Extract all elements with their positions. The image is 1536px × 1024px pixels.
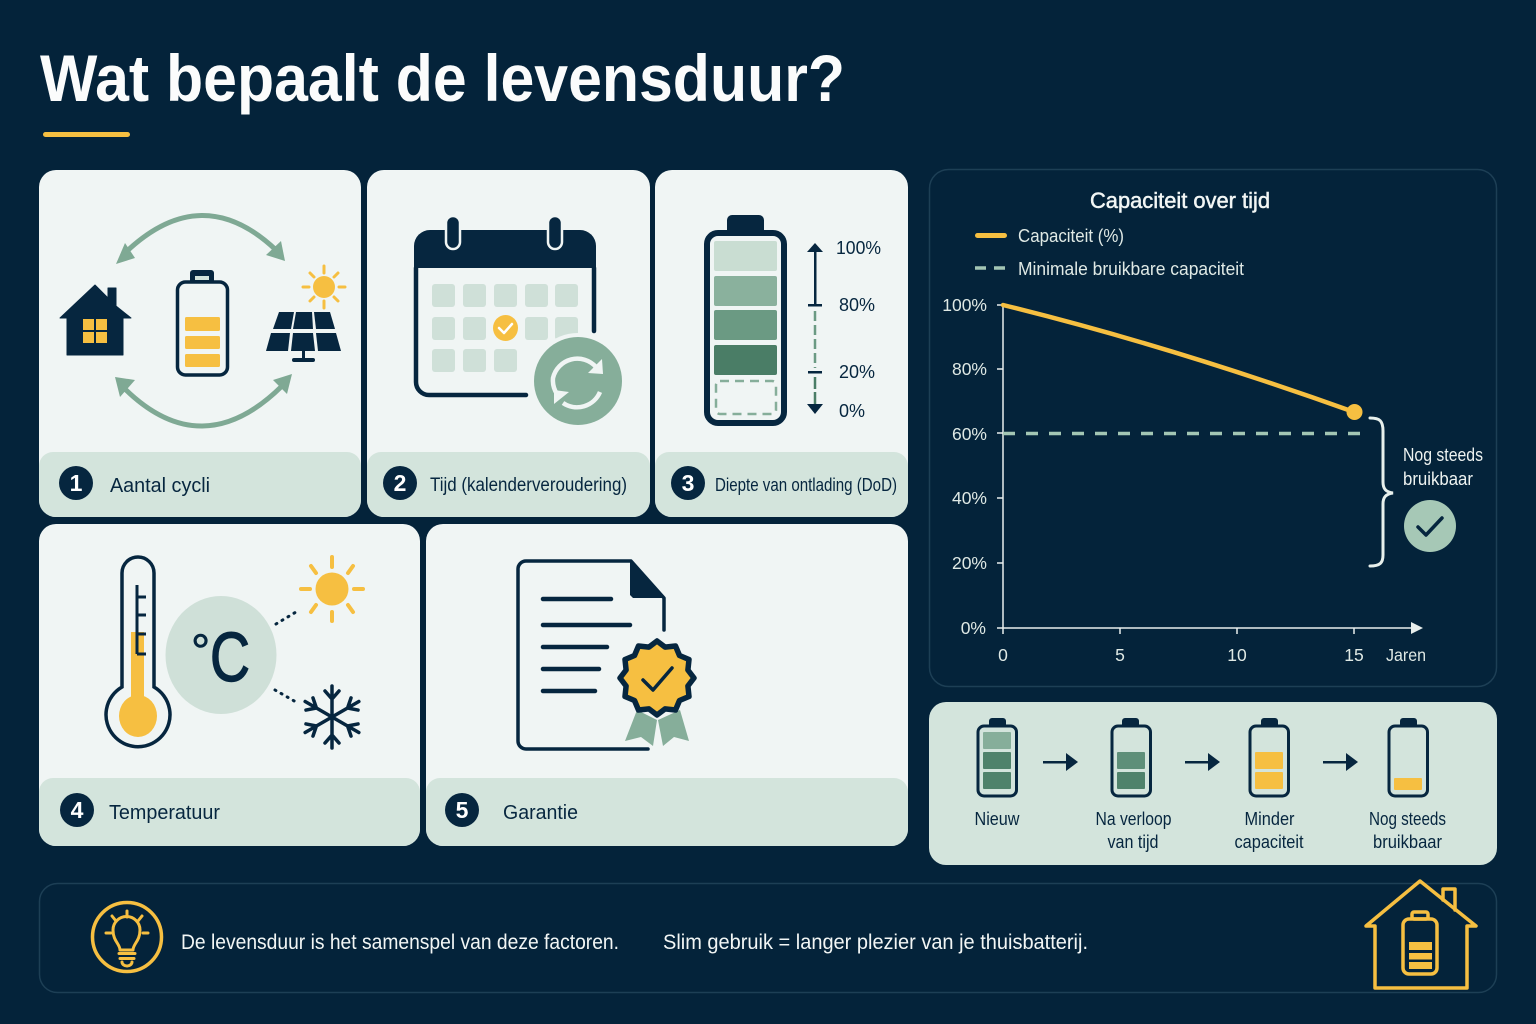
callout: nog steeds bruikbaar: [1403, 444, 1483, 552]
stage: na verloop van tijd: Na verloop: [1096, 808, 1172, 829]
footer text: Slim gebruik = langer plezier van je thuisbatterij.: [663, 930, 1088, 954]
label band: 4: [71, 797, 84, 823]
label band: [39, 452, 361, 517]
icon: solar panel: [266, 312, 341, 362]
label band: [367, 452, 650, 517]
legend: [975, 226, 1244, 279]
label band: 1: [70, 470, 83, 496]
icon: calendar: [414, 216, 596, 395]
label band: Garantie: [503, 802, 578, 824]
legend: Minimale bruikbare capaciteit: [1018, 259, 1244, 279]
panel: diepte van ontlading: [655, 170, 908, 517]
icon: cycle arrows: [115, 215, 292, 426]
icon: sun: [303, 266, 345, 308]
scale labels: 0%: [839, 401, 865, 421]
label band: [655, 452, 908, 517]
label band: Tijd (kalenderveroudering): [430, 475, 627, 496]
celsius circle: [166, 596, 276, 714]
scale labels: 20%: [839, 362, 875, 382]
panel: temperatuur: [39, 524, 420, 846]
icon: refresh circle: [530, 333, 626, 429]
icon: house: [60, 285, 131, 355]
icon: snowflake: [302, 686, 362, 748]
scale arrow: [807, 243, 823, 414]
label band: Temperatuur: [109, 802, 220, 824]
callout: nog steeds bruikbaar: Nog steeds: [1403, 444, 1483, 465]
panel: aantal cycli: [39, 170, 361, 517]
y axis labels: [942, 295, 987, 638]
stage: nog steeds bruikbaar: Nog steeds: [1369, 808, 1446, 829]
arrow: [1043, 753, 1078, 771]
celsius circle: C: [210, 618, 250, 696]
stage: minder capaciteit: capaciteit: [1234, 831, 1304, 852]
celsius circle: °: [191, 626, 210, 679]
chart title: Capaciteit over tijd: [1090, 188, 1270, 213]
y axis labels: 100%: [942, 295, 987, 315]
y axis labels: 60%: [952, 424, 987, 444]
stage: na verloop van tijd: van tijd: [1108, 831, 1158, 852]
x axis labels: 0: [998, 645, 1008, 665]
legend: Capaciteit (%): [1018, 226, 1124, 246]
panel: kalenderveroudering: [367, 170, 650, 517]
x axis labels: 15: [1344, 645, 1364, 665]
label band: Diepte van ontlading (DoD): [715, 475, 897, 495]
brace: [1370, 418, 1393, 566]
y axis labels: 80%: [952, 359, 987, 379]
label band: 2: [394, 470, 406, 496]
panel: capaciteit chart: [930, 170, 1496, 686]
y axis labels: 0%: [961, 618, 986, 638]
x axis labels: 10: [1227, 645, 1247, 665]
minimum capacity dashed line: [1003, 432, 1360, 435]
stage: nieuw: [974, 718, 1020, 829]
x axis labels: [998, 645, 1426, 665]
icon: battery levels: [707, 215, 784, 423]
panel: battery stages: [929, 702, 1497, 865]
stage: na verloop van tijd: [1096, 718, 1172, 852]
footer text: De levensduur is het samenspel van deze factoren.: [181, 930, 619, 954]
stage: nog steeds bruikbaar: bruikbaar: [1373, 831, 1442, 852]
label band: 5: [456, 797, 469, 823]
icon: lightbulb: [92, 902, 162, 972]
arrow: [1185, 753, 1220, 771]
icon: certificate seal: [620, 641, 694, 746]
title underline: [43, 132, 130, 137]
panel: garantie: [426, 524, 908, 846]
icon: battery: [178, 270, 228, 375]
stage: minder capaciteit: [1234, 718, 1304, 852]
label band: [39, 778, 420, 846]
scale labels: 100%: [836, 238, 881, 258]
title: Wat bepaalt de levensduur?: [40, 41, 845, 115]
stage: nieuw: Nieuw: [974, 808, 1020, 829]
arrow: [1323, 753, 1358, 771]
label band: [426, 778, 908, 846]
stage: minder capaciteit: Minder: [1244, 808, 1294, 829]
y axis labels: 20%: [952, 553, 987, 573]
x axis labels: 5: [1115, 645, 1125, 665]
connector dots: [275, 612, 296, 702]
icon: document: [518, 560, 665, 749]
icon: house with battery: [1366, 881, 1476, 988]
icon: thermometer: [106, 557, 170, 747]
capacity line: [1003, 305, 1362, 420]
axes: [997, 305, 1423, 634]
label band: 3: [682, 470, 694, 496]
callout: nog steeds bruikbaar: bruikbaar: [1403, 468, 1473, 489]
label band: Aantal cycli: [110, 475, 210, 497]
x axis labels: Jaren: [1386, 645, 1426, 665]
y axis labels: 40%: [952, 488, 987, 508]
stage: nog steeds bruikbaar: [1369, 718, 1446, 852]
scale labels: 80%: [839, 295, 875, 315]
scale labels: [836, 238, 881, 421]
icon: sun: [301, 557, 363, 621]
panel: footer: [40, 881, 1496, 992]
